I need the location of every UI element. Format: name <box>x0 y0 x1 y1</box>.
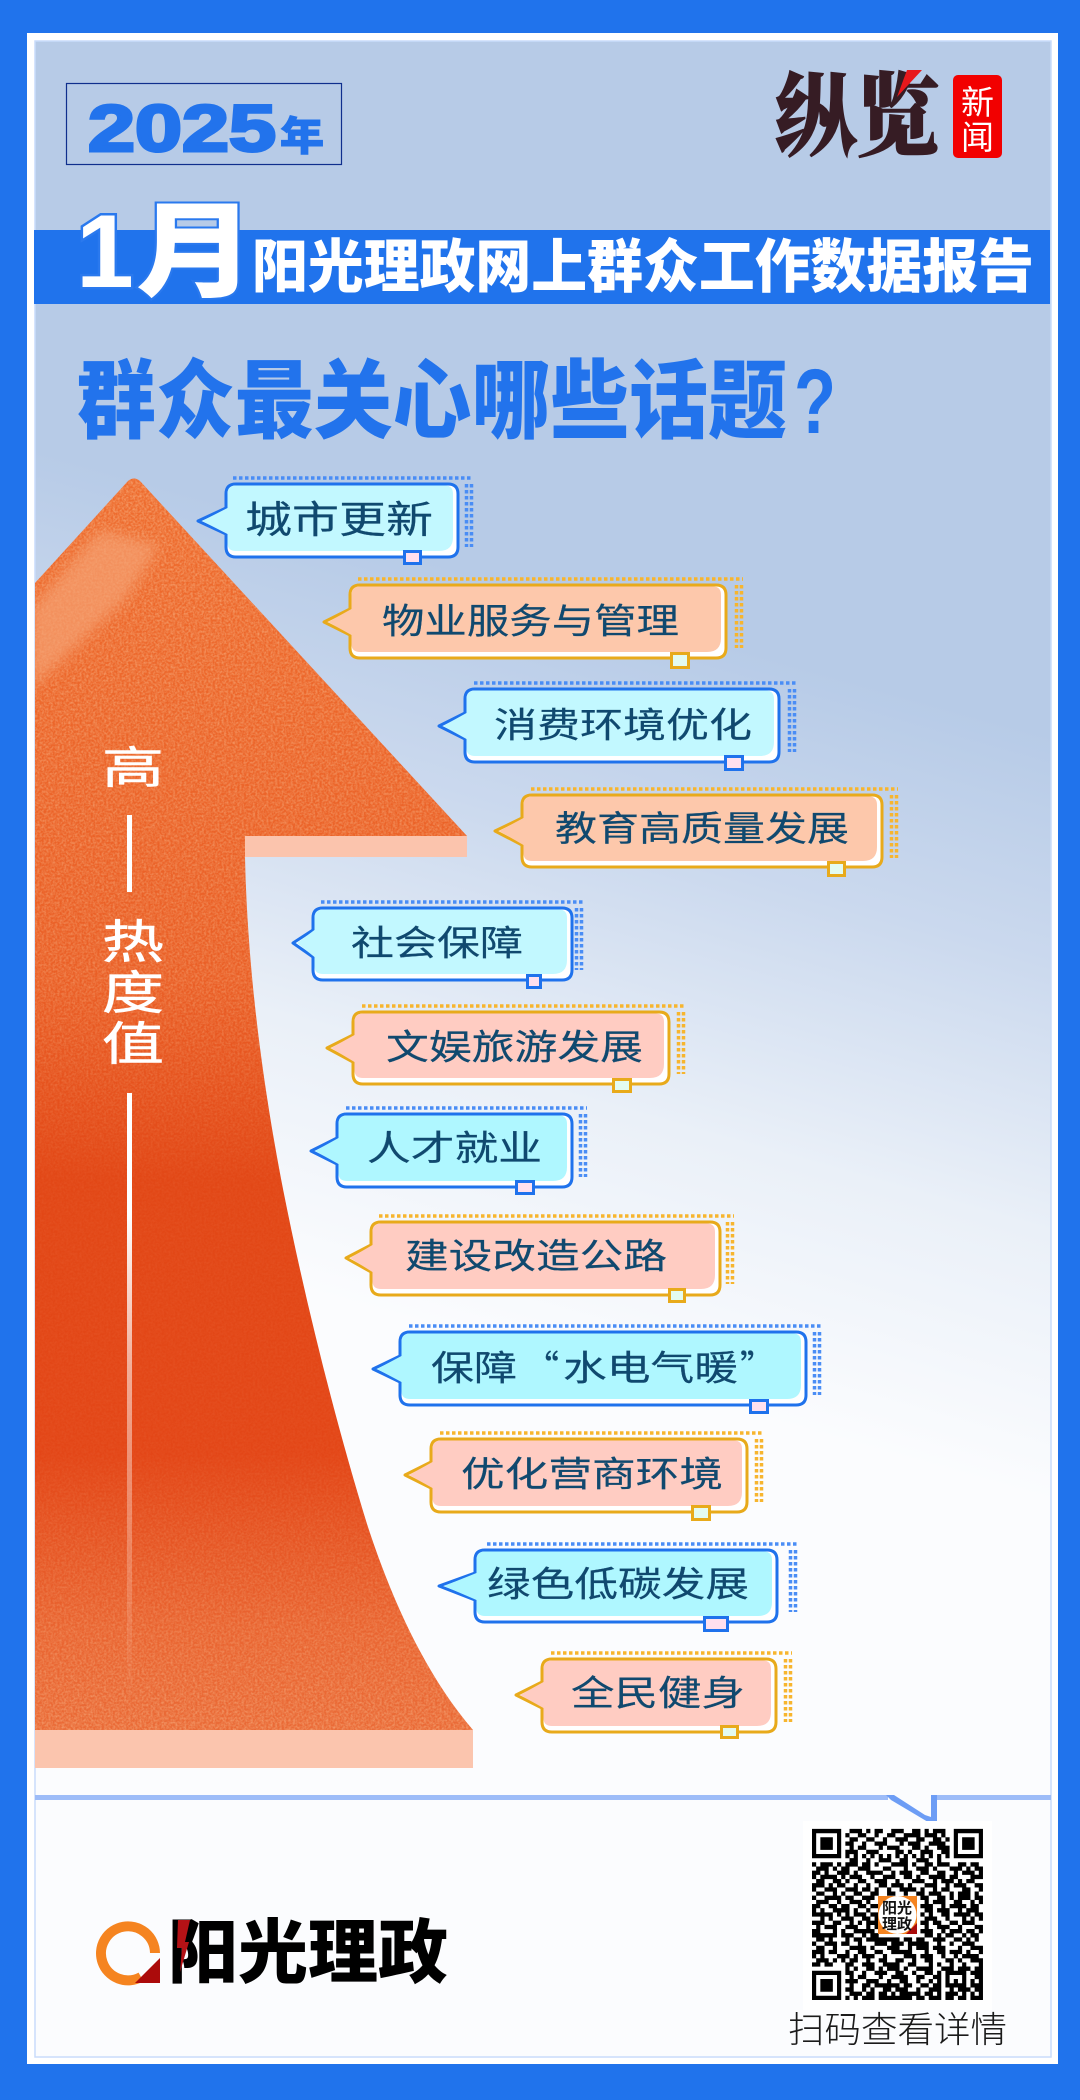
bubble: 社会保障 <box>293 902 583 988</box>
logo wordmark: 阳光理政 <box>168 1897 448 1998</box>
bubble: 消费环境优化 <box>439 683 796 770</box>
bubble: 保障“水电气暖”: “ <box>524 1340 559 1392</box>
title: 1月: 1 <box>76 194 134 310</box>
logo: 纵览新闻: 纵览 <box>775 44 939 174</box>
bubble: 教育高质量发展: 教育高质量发展 <box>555 801 849 852</box>
arrow base shade <box>35 1730 473 1768</box>
bubble: 优化营商环境 <box>405 1433 763 1520</box>
logo: 纵览新闻: 新 <box>961 76 994 124</box>
bubble: 保障“水电气暖”: 水电气暖 <box>563 1340 738 1392</box>
bubble: 建设改造公路 <box>346 1216 734 1302</box>
bubble: 绿色低碳发展 <box>439 1544 797 1630</box>
arrow wing shade <box>245 836 467 857</box>
title: 1月: 月 <box>136 167 255 318</box>
bubble: 绿色低碳发展: 绿色低碳发展 <box>487 1556 749 1608</box>
caption: 扫码查看详情: 扫码查看详情 <box>788 2001 1007 2053</box>
QR code <box>803 1821 992 2010</box>
bubble: 人才就业 <box>311 1108 587 1194</box>
logo bolt <box>177 1920 190 1972</box>
footer divider with pointer <box>35 1795 1051 1822</box>
heading: 群众最关心哪些话题？: 群众最关心哪些话题 <box>77 331 787 456</box>
bubble: 文娱旅游发展 <box>327 1006 685 1092</box>
bubble: 保障“水电气暖” <box>373 1326 821 1412</box>
QR centre logo: 阳光 <box>882 1897 912 1918</box>
arrow body <box>35 478 473 1730</box>
logo red triangle <box>135 1958 160 1983</box>
axis label: 高 热度值: 热 <box>102 906 164 972</box>
bubble: 保障“水电气暖”: 保障 <box>431 1340 517 1392</box>
footer logo: 阳光理政 <box>101 1897 448 1998</box>
bubble: 教育高质量发展 <box>495 789 898 876</box>
bubble: 文娱旅游发展: 文娱旅游发展 <box>386 1020 643 1070</box>
bubble: 物业服务与管理: 物业服务与管理 <box>382 594 679 644</box>
title: report name: 阳光理政网上群众工作数据报告 <box>252 220 1034 304</box>
QR centre logo <box>878 1896 917 1934</box>
arrow grain <box>35 478 473 1730</box>
bubble: 城市更新: 城市更新 <box>245 489 433 544</box>
axis label: 高 热度值: 高 <box>102 732 164 796</box>
bubble: 城市更新 <box>198 478 473 564</box>
bubble: 消费环境优化: 消费环境优化 <box>494 698 752 748</box>
title: 1月 <box>76 167 255 318</box>
QR centre logo: 理政 <box>882 1913 912 1934</box>
bubble: 优化营商环境: 优化营商环境 <box>461 1446 723 1498</box>
date badge: 2025年: 2025 <box>88 91 276 165</box>
bubble: 保障“水电气暖”: ” <box>740 1340 775 1392</box>
bubble: 全民健身: 全民健身 <box>571 1666 745 1716</box>
arrow: heat value <box>30 478 473 1768</box>
date badge: 2025年: 年 <box>280 104 324 162</box>
bubble: 人才就业: 人才就业 <box>367 1120 542 1172</box>
heading: 群众最关心哪些话题？: ? <box>794 351 836 453</box>
axis label: 高 热度值 <box>102 732 164 1700</box>
arrow highlight <box>30 530 160 690</box>
title band <box>34 167 1050 318</box>
logo: 纵览新闻: 闻 <box>961 111 994 159</box>
bubble: 社会保障: 社会保障 <box>351 916 523 966</box>
logo ring <box>101 1926 155 1980</box>
date badge: 2025年 <box>66 84 342 165</box>
bubble: 建设改造公路: 建设改造公路 <box>405 1228 667 1280</box>
axis label: 高 热度值: 度 <box>102 957 164 1023</box>
bubble: 物业服务与管理 <box>324 579 743 668</box>
bubble: 全民健身 <box>516 1653 792 1738</box>
axis label: 高 热度值: 值 <box>102 1008 164 1074</box>
